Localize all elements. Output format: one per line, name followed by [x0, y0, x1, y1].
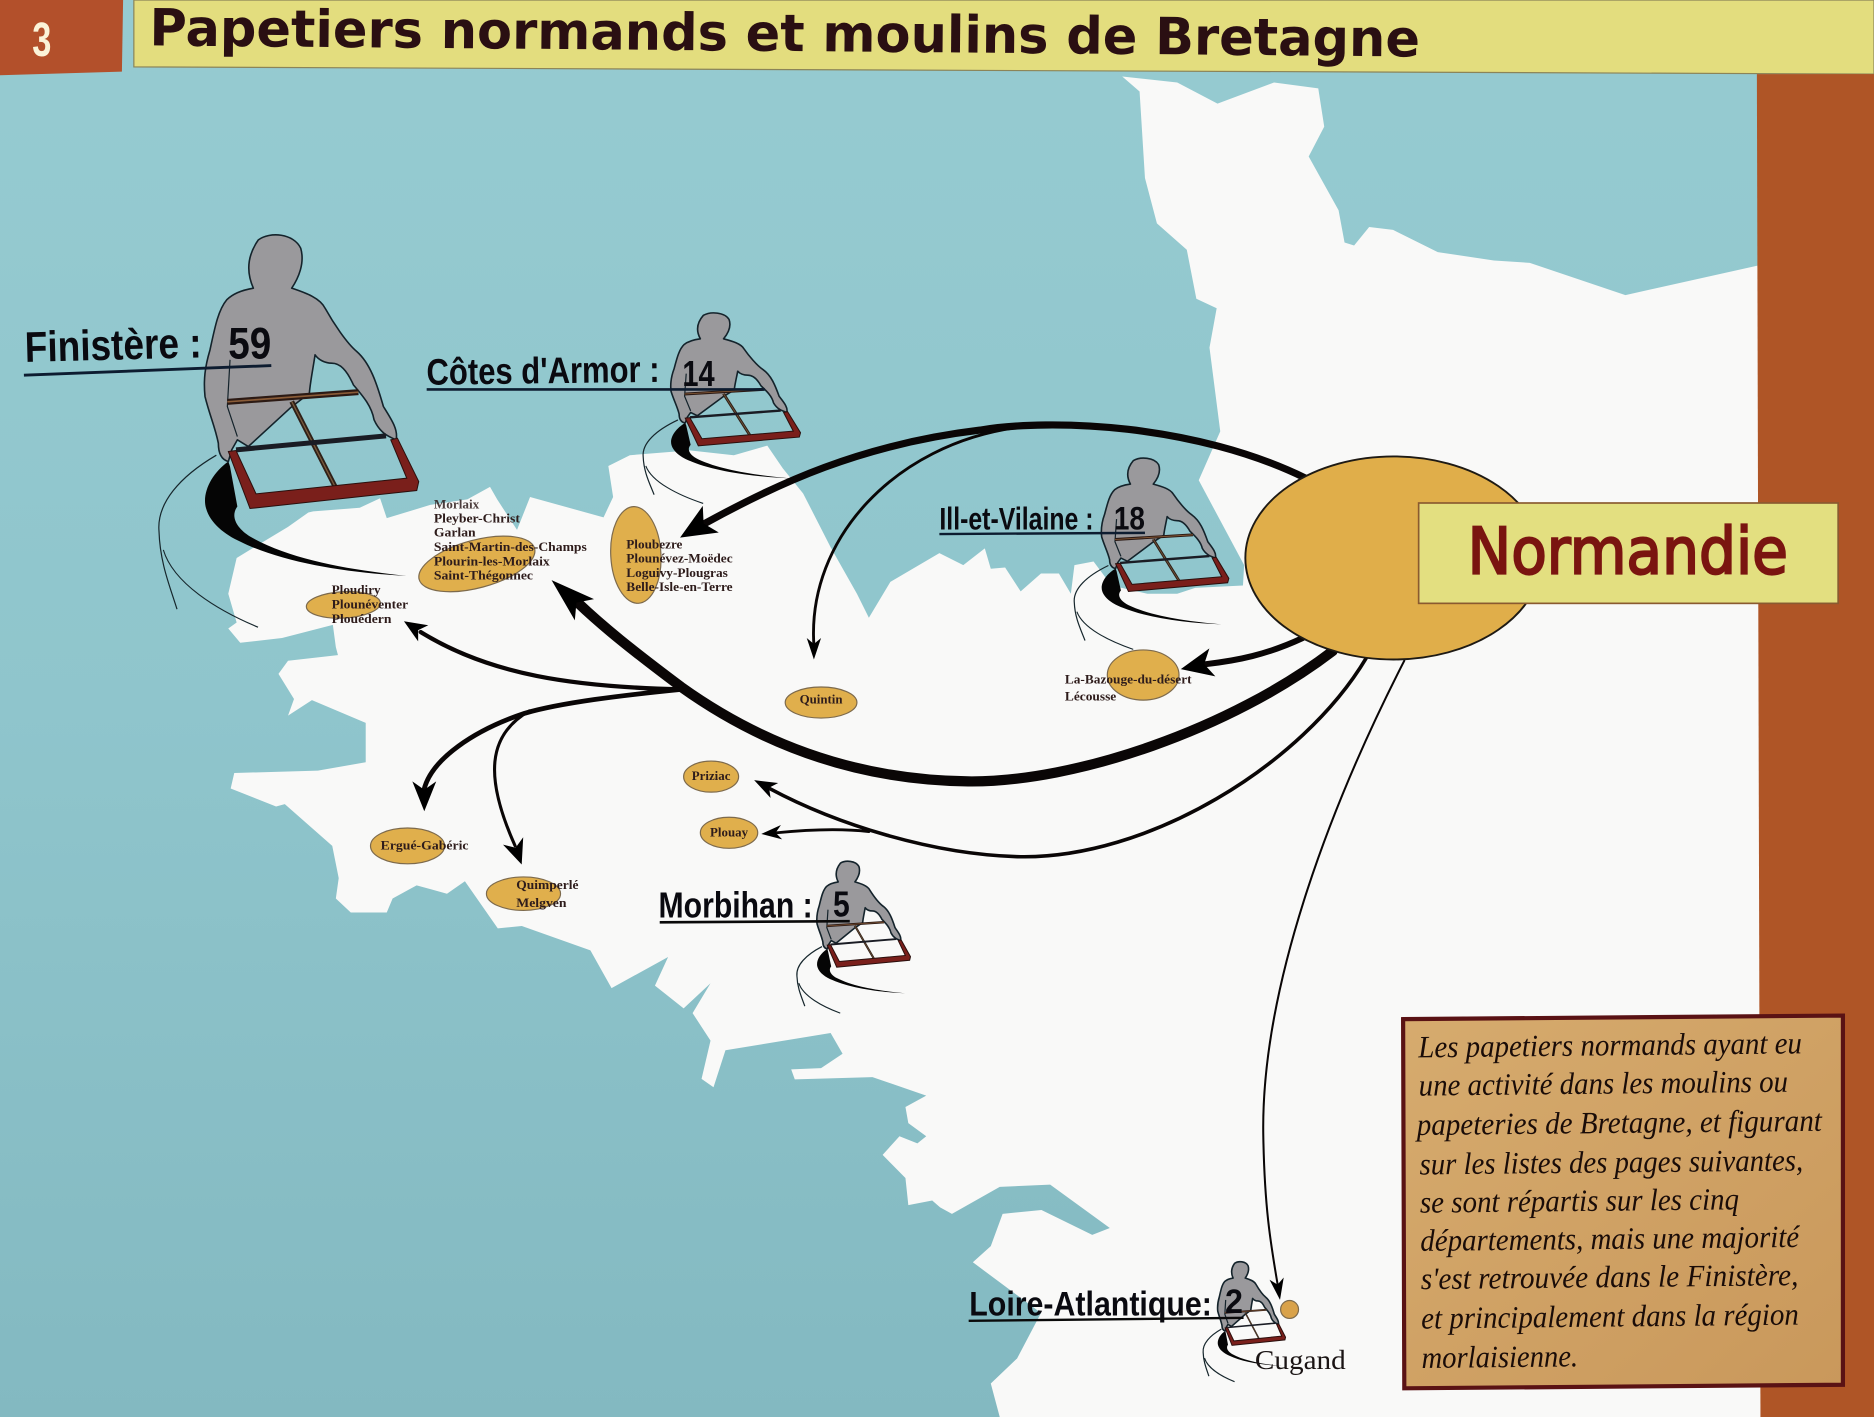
callout: explanatory note: morlaisienne.	[1421, 1338, 1578, 1375]
towns: Quintin: Quintin	[800, 693, 843, 707]
header: number tab	[0, 0, 123, 75]
towns: Quintin	[785, 687, 857, 718]
towns: Priziac: Priziac	[692, 769, 731, 783]
arrow: to Ergué-Gabéric	[412, 689, 681, 811]
callout: explanatory note: sur les listes des pages suivantes,	[1419, 1142, 1803, 1181]
towns: Ploubezre group: Plounévez-Moëdec	[626, 552, 733, 566]
callout: explanatory note: et principalement dans la région	[1421, 1297, 1799, 1336]
arrow: to Quimperlé	[495, 711, 532, 868]
label: Finistère 59: Finistère :	[24, 319, 202, 372]
towns: Cugand	[1255, 1301, 1346, 1375]
towns: Ploubezre group	[608, 505, 733, 605]
Normandie origin oval	[1245, 456, 1542, 660]
towns: Ploudiry group: Ploudiry	[332, 583, 381, 597]
towns: Ploudiry group: Plounéventer	[332, 598, 408, 612]
label: Côtes d'Armor 14: 14	[682, 354, 715, 394]
towns: Morlaix group: Garlan	[434, 525, 476, 539]
figure: Finistère papermaker	[159, 235, 419, 627]
towns: Morlaix group: Saint-Martin-des-Champs	[434, 540, 587, 554]
arrow: to Priziac	[750, 658, 1366, 857]
towns: La Bazouge group: Lécousse	[1065, 690, 1117, 704]
label: Morbihan 5: 5	[833, 884, 850, 924]
towns: Morlaix group: Pleyber-Christ	[434, 512, 521, 526]
Normandie label box: Normandie	[1468, 515, 1788, 589]
towns: Ploubezre group: Belle-Isle-en-Terre	[626, 580, 733, 594]
arrow: to Cugand	[1263, 661, 1404, 1301]
arrow: to Quintin	[807, 428, 1016, 660]
arrow: main flow to Morlaix	[542, 570, 1333, 781]
label: Ille-et-Vilaine 18: 18	[1114, 500, 1145, 536]
callout: explanatory note: une activité dans les moulins ou	[1419, 1064, 1788, 1103]
towns: Ploubezre group: Ploubezre	[626, 537, 683, 551]
arrow: to Ploubezre group	[672, 425, 1305, 551]
towns: Plouay: Plouay	[710, 825, 749, 839]
header: title band	[134, 0, 1874, 74]
towns: Cugand: Cugand	[1255, 1345, 1346, 1375]
header: number tab: 3	[32, 14, 51, 67]
callout: explanatory note: départements, mais une majorité	[1420, 1219, 1800, 1258]
towns: Plouay	[700, 817, 758, 848]
header: title band: Papetiers normands et moulins de Bretagne	[149, 0, 1420, 69]
towns: Morlaix group: Saint-Thégonnec	[434, 568, 533, 582]
towns: Ploubezre group: Loguivy-Plougras	[626, 566, 728, 580]
callout: explanatory note: s'est retrouvée dans le Finistère,	[1421, 1257, 1799, 1296]
figure: Loire-Atlantique papermaker	[1203, 1262, 1286, 1382]
callout: explanatory note: papeteries de Bretagne, et figurant	[1415, 1103, 1823, 1142]
label: Loire-Atlantique 2: 2	[1225, 1283, 1243, 1321]
towns: Ploudiry group: Plouédern	[332, 612, 391, 626]
callout: explanatory note	[1403, 1016, 1843, 1388]
towns: Morlaix group: Plourin-les-Morlaix	[434, 555, 550, 569]
right brown band	[1757, 74, 1874, 1417]
towns: Quimperlé and Melgven: Quimperlé	[516, 878, 579, 892]
label: Loire-Atlantique 2: Loire-Atlantique:	[969, 1285, 1212, 1323]
label: Ille-et-Vilaine 18: Ill-et-Vilaine :	[939, 501, 1094, 536]
callout: explanatory note: se sont répartis sur les cinq	[1420, 1181, 1739, 1220]
towns: Morlaix group	[413, 497, 587, 602]
towns: La Bazouge group: La-Bazouge-du-désert	[1065, 672, 1192, 686]
Normandie label box	[1419, 503, 1838, 603]
figure: Ille-et-Vilaine papermaker	[1074, 458, 1229, 649]
flow arrows from Normandie	[399, 425, 1404, 1301]
label: Finistère 59: 59	[228, 319, 271, 368]
figure: Côtes d'Armor papermaker	[643, 313, 801, 503]
label: Côtes d'Armor 14: Côtes d'Armor :	[426, 348, 660, 393]
map: land of Bretagne and Normandie	[228, 76, 1762, 1417]
towns: Ergué-Gabéric	[370, 828, 469, 864]
arrow: to Plouay	[761, 825, 869, 841]
towns: Ploudiry group	[306, 583, 408, 626]
figure: Morbihan papermaker	[797, 861, 911, 1013]
towns: Priziac	[684, 761, 739, 792]
towns: Ergué-Gabéric: Ergué-Gabéric	[381, 838, 469, 852]
arrow: to Ploudiry	[399, 613, 681, 689]
towns: Quimperlé and Melgven: Melgven	[516, 896, 567, 910]
towns: Quimperlé and Melgven	[486, 877, 579, 910]
callout: explanatory note: Les papetiers normands ayant eu	[1417, 1025, 1802, 1064]
towns: La Bazouge group	[1065, 650, 1192, 704]
label: Morbihan 5: Morbihan :	[659, 886, 813, 926]
towns: Morlaix group: Morlaix	[434, 497, 480, 511]
arrow: to La Bazouge	[1178, 638, 1303, 683]
